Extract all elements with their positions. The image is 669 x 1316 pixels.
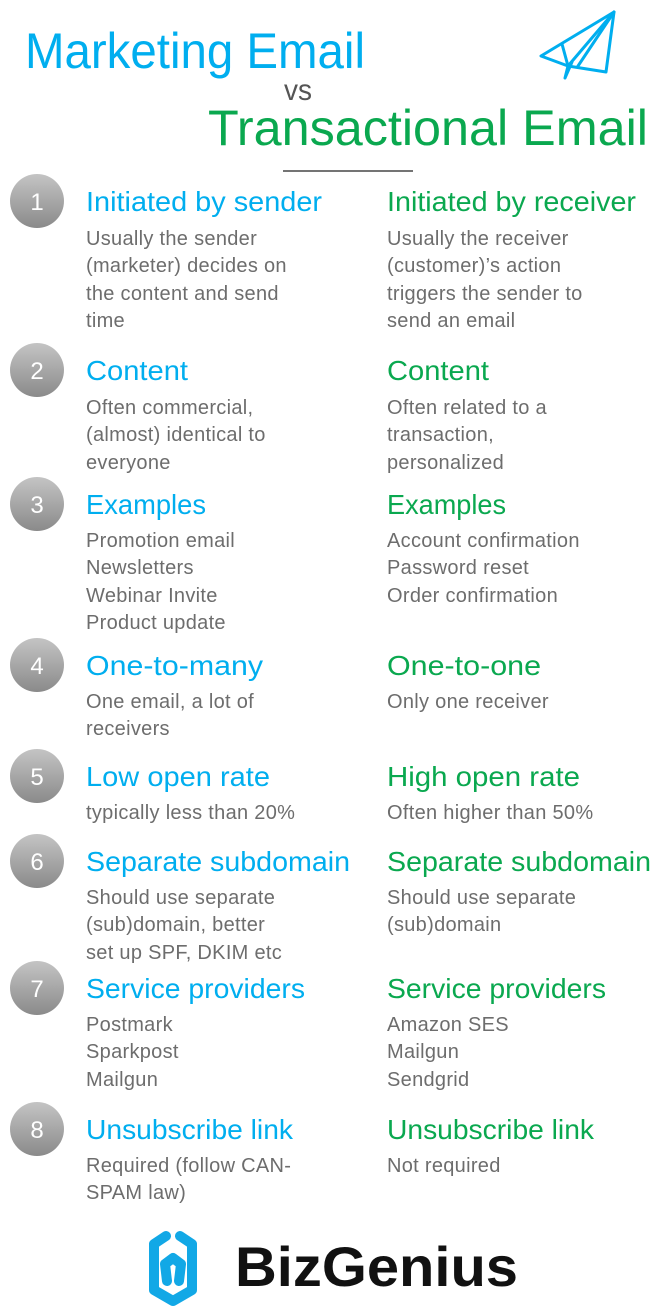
logo: BizGenius: BizGenius	[235, 1235, 518, 1298]
item 3: Examples	[86, 489, 206, 520]
item 5	[10, 749, 593, 824]
item 1: Usually the sender	[86, 228, 257, 250]
item 1: Initiated by receiver	[387, 186, 636, 217]
item 2: transaction,	[387, 424, 494, 446]
item 3	[10, 477, 580, 634]
item 7: Sendgrid	[387, 1069, 469, 1091]
item 6: 6	[30, 849, 44, 876]
item 2	[10, 343, 548, 474]
item 7: Service providers	[387, 973, 606, 1004]
item 1: the content and send	[86, 283, 279, 305]
item 1: Initiated by sender	[86, 186, 322, 217]
item 3: Password reset	[387, 557, 529, 579]
item 8: Not required	[387, 1155, 501, 1177]
item 7: Mailgun	[387, 1041, 459, 1063]
item 3: Promotion email	[86, 530, 235, 552]
item 8: Unsubscribe link	[86, 1114, 294, 1145]
item 2: 2	[30, 358, 44, 385]
item 6: Separate subdomain	[387, 846, 651, 877]
item 8: SPAM law)	[86, 1182, 186, 1204]
item 1	[10, 174, 636, 332]
item 4: Only one receiver	[387, 691, 549, 713]
item 1: 1	[30, 189, 44, 216]
item 6	[10, 834, 651, 964]
item 1: time	[86, 310, 125, 332]
item 4: One email, a lot of	[86, 691, 254, 713]
item 5: typically less than 20%	[86, 802, 295, 824]
item 1: Usually the receiver	[387, 228, 569, 250]
item 3: Product update	[86, 612, 226, 634]
item 2: everyone	[86, 452, 171, 474]
item 7: Postmark	[86, 1014, 174, 1036]
title: Transactional Email: Transactional Email	[208, 100, 648, 156]
item 7: Amazon SES	[387, 1014, 509, 1036]
item 7: Service providers	[86, 973, 305, 1004]
item 4: 4	[30, 653, 44, 680]
item 6: Should use separate	[86, 887, 275, 909]
item 8: Unsubscribe link	[387, 1114, 595, 1145]
item 7: Mailgun	[86, 1069, 158, 1091]
item 4: One-to-one	[387, 650, 541, 681]
item 7	[10, 961, 606, 1091]
item 3: Order confirmation	[387, 585, 558, 607]
icon: paper plane	[541, 12, 614, 78]
item 1: triggers the sender to	[387, 283, 583, 305]
item 5: High open rate	[387, 761, 580, 792]
item 6: (sub)domain	[387, 914, 501, 936]
item 5: 5	[30, 764, 44, 791]
item 6: Should use separate	[387, 887, 576, 909]
item 2: Content	[86, 355, 188, 386]
item 2: personalized	[387, 452, 504, 474]
item 3: Examples	[387, 489, 506, 520]
item 1: send an email	[387, 310, 515, 332]
item 6: (sub)domain, better	[86, 914, 265, 936]
item 3: 3	[30, 492, 44, 519]
item 1: (marketer) decides on	[86, 255, 287, 277]
item 8: Required (follow CAN-	[86, 1155, 291, 1177]
item 2: Content	[387, 355, 489, 386]
item 3: Webinar Invite	[86, 585, 218, 607]
title: Marketing Email: Marketing Email	[25, 23, 365, 79]
item 5: Often higher than 50%	[387, 802, 593, 824]
item 8: 8	[30, 1117, 44, 1144]
item 6: set up SPF, DKIM etc	[86, 942, 282, 964]
item 2: Often related to a	[387, 397, 548, 419]
item 4: One-to-many	[86, 650, 263, 681]
item 2: Often commercial,	[86, 397, 253, 419]
item 1: (customer)’s action	[387, 255, 561, 277]
title: vs: vs	[284, 74, 312, 107]
divider	[283, 170, 413, 172]
item 3: Account confirmation	[387, 530, 580, 552]
item 8	[10, 1102, 595, 1204]
item 2: (almost) identical to	[86, 424, 266, 446]
item 7: 7	[30, 976, 44, 1003]
item 3: Newsletters	[86, 557, 194, 579]
item 4: receivers	[86, 718, 170, 740]
item 4	[10, 638, 549, 740]
item 7: Sparkpost	[86, 1041, 179, 1063]
item 5: Low open rate	[86, 761, 270, 792]
item 6: Separate subdomain	[86, 846, 350, 877]
